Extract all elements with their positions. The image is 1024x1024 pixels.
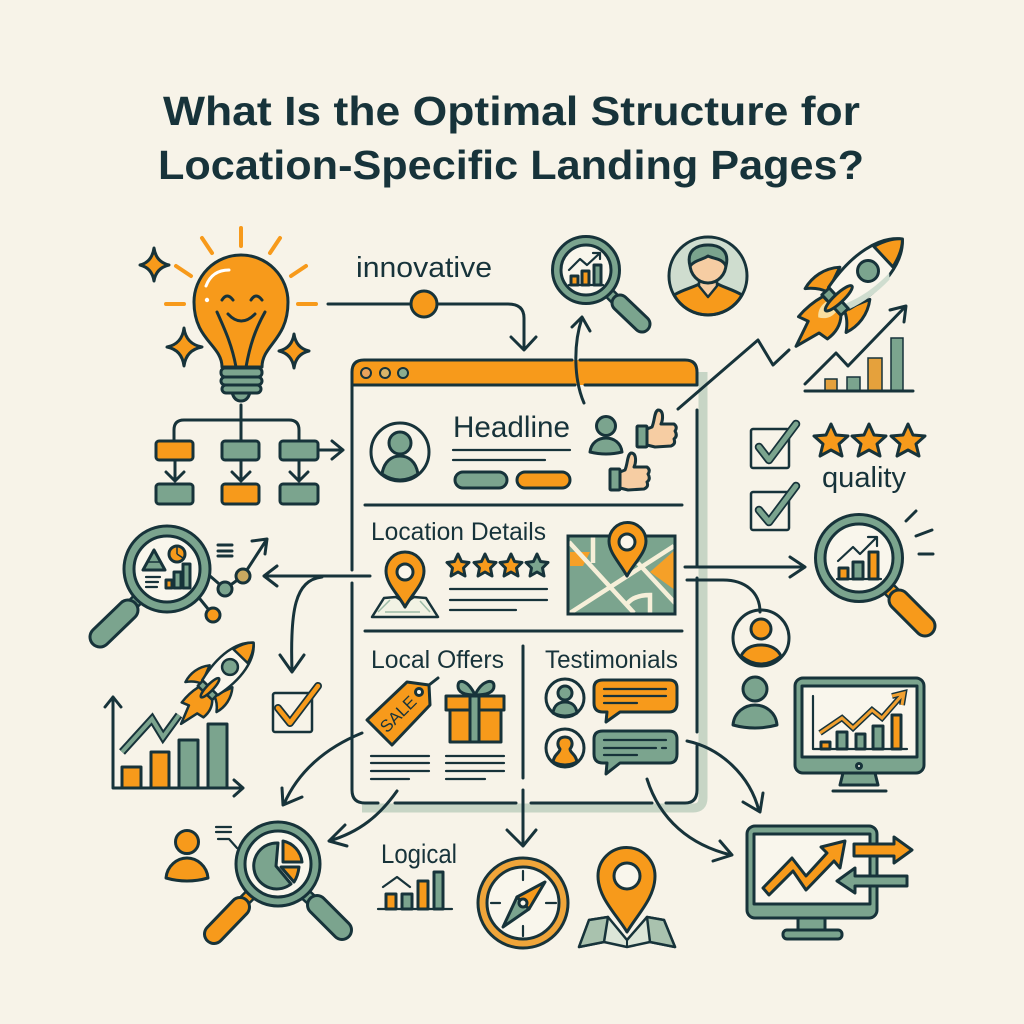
title [158, 88, 864, 188]
arrows: to lower magnifier [282, 733, 397, 846]
section: local offers: SALE [376, 692, 420, 736]
icon: sparkles [140, 248, 309, 368]
chart: logical: Logical [381, 839, 457, 869]
section: local offers [367, 646, 504, 779]
connector: innovative [328, 252, 536, 350]
icon: right magnifier [685, 511, 933, 626]
panel: browser window [352, 360, 703, 808]
section: headline [371, 411, 570, 488]
icon: orange person with lines [166, 830, 208, 881]
icon: lower magnifier with pie [214, 822, 342, 934]
section: local offers: Local Offers [371, 646, 504, 674]
icon: orange checkbox [273, 686, 318, 732]
rating: quality stars: quality [822, 462, 907, 494]
connector: innovative: innovative [356, 252, 492, 284]
arrow: down to compass [507, 790, 536, 846]
icon: green person [733, 677, 777, 728]
rating: quality stars [814, 424, 925, 494]
section: location details [371, 518, 548, 617]
section: testimonials [545, 646, 678, 774]
icon: top right rocket [678, 216, 924, 409]
icon: green checkboxes [751, 424, 796, 530]
chart: logical [378, 839, 457, 909]
section: location details: Location Details [371, 518, 546, 546]
icon: large map pin [579, 848, 675, 947]
title: Location-Specific Landing Pages? [158, 142, 864, 188]
section: headline: Headline [453, 411, 570, 444]
section: testimonials: Testimonials [545, 646, 678, 674]
icon: top magnifier [552, 236, 642, 403]
chart: top right bar chart [805, 306, 913, 391]
icon: rocket and growth chart [105, 627, 270, 796]
arrows: testimonials to monitors [647, 741, 763, 861]
icon: monitor with trend and exchange arrows [747, 826, 912, 939]
icon: map with pin [568, 522, 675, 614]
icon: person and thumbs up [590, 410, 676, 490]
icon: monitor with chart [795, 678, 924, 791]
icon: top person avatar [669, 237, 747, 315]
icon: compass [478, 858, 568, 948]
icon: right avatar with connector [687, 580, 789, 666]
flow chart [156, 405, 343, 504]
arrows: location details to left [264, 566, 370, 672]
icon: magnifier with analytics [100, 526, 267, 637]
title: What Is the Optimal Structure for [163, 88, 860, 134]
icon: smiling light bulb [166, 228, 316, 401]
